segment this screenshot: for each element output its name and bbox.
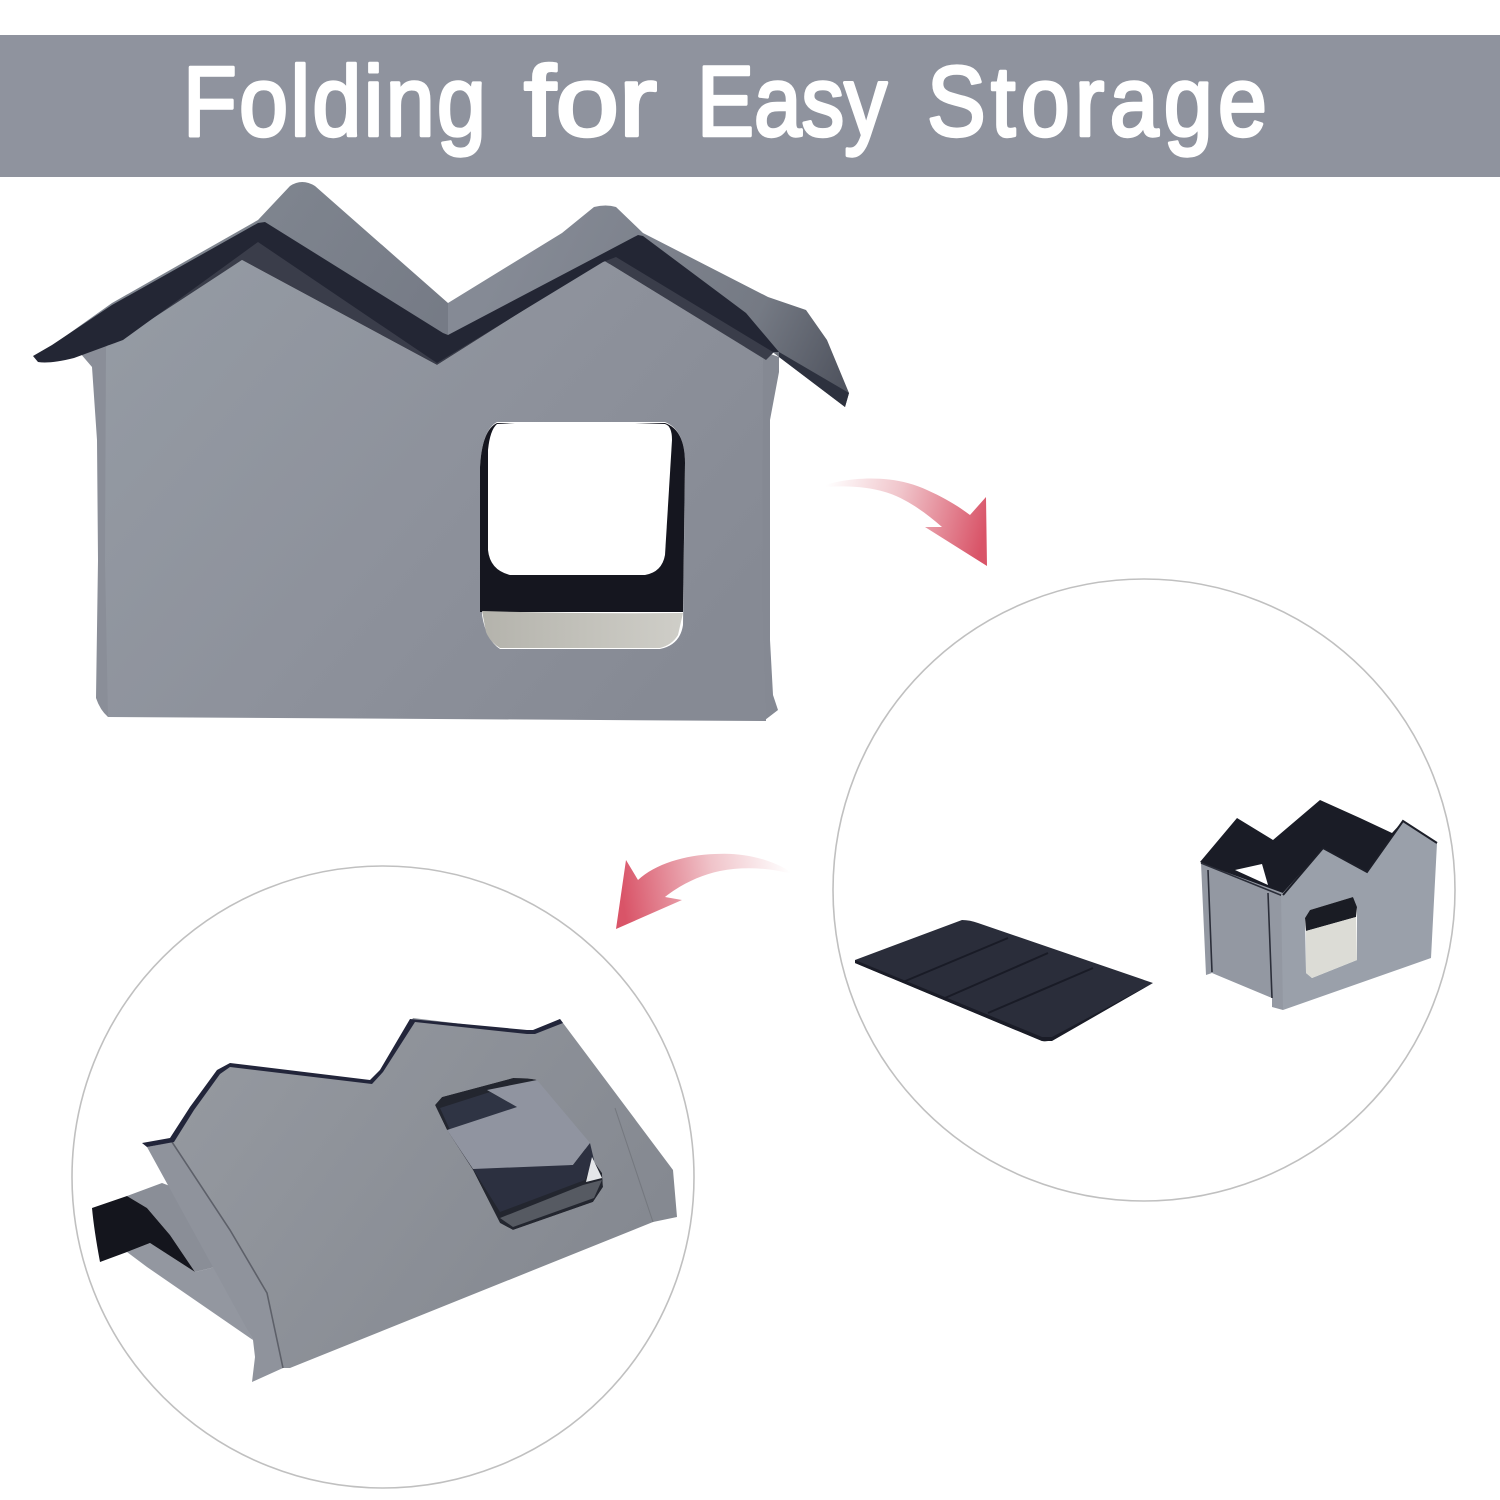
small house front wall xyxy=(1281,821,1437,1010)
door window xyxy=(488,422,672,575)
folded opening strap xyxy=(440,1092,517,1130)
folded dark lining xyxy=(92,1196,195,1272)
folded opening white sliver xyxy=(586,1157,602,1182)
folded inner flap xyxy=(447,1080,590,1172)
folded opening lower strap xyxy=(473,1143,594,1212)
under-band wall shadow xyxy=(106,238,776,365)
roof dark band xyxy=(33,222,779,363)
small house interior xyxy=(1200,800,1403,900)
title: Easy xyxy=(697,45,887,157)
title: Storage xyxy=(927,45,1267,157)
right side panel xyxy=(745,345,779,720)
title xyxy=(183,45,1267,157)
folded opening interior xyxy=(435,1078,603,1230)
circle panel: folded xyxy=(72,866,694,1488)
folded back flap xyxy=(127,1183,215,1272)
small house door dark xyxy=(1305,897,1357,931)
folded front panel xyxy=(172,1018,677,1368)
roof left slope xyxy=(60,182,448,350)
arrow: to folded view xyxy=(616,854,795,929)
roof right slope xyxy=(448,206,849,407)
title banner xyxy=(0,35,1500,177)
small house door cushion xyxy=(1306,917,1357,978)
front wall with door cut-out xyxy=(105,260,766,721)
circle panel: disassembled xyxy=(833,579,1455,1201)
folded top edge xyxy=(142,1019,563,1147)
folded opening gloss xyxy=(500,1180,602,1227)
title: for xyxy=(524,45,657,157)
small house left wall xyxy=(1201,863,1283,1010)
folded fold strip xyxy=(147,1142,283,1382)
assembled pet house xyxy=(33,182,849,721)
left side panel xyxy=(80,345,110,717)
roof right tip edge xyxy=(779,352,849,407)
small house inner gap xyxy=(1235,864,1268,885)
flat mat xyxy=(855,920,1153,1041)
folded lower layer xyxy=(127,1243,253,1340)
title: Folding xyxy=(183,45,486,157)
arrow: to flat view xyxy=(817,478,987,566)
small house top rim xyxy=(1283,821,1437,895)
folded fold line xyxy=(172,1142,283,1368)
folded right seam xyxy=(615,1108,653,1222)
cushion xyxy=(482,611,683,648)
door interior xyxy=(480,423,685,612)
small house left fold line xyxy=(1201,863,1283,998)
